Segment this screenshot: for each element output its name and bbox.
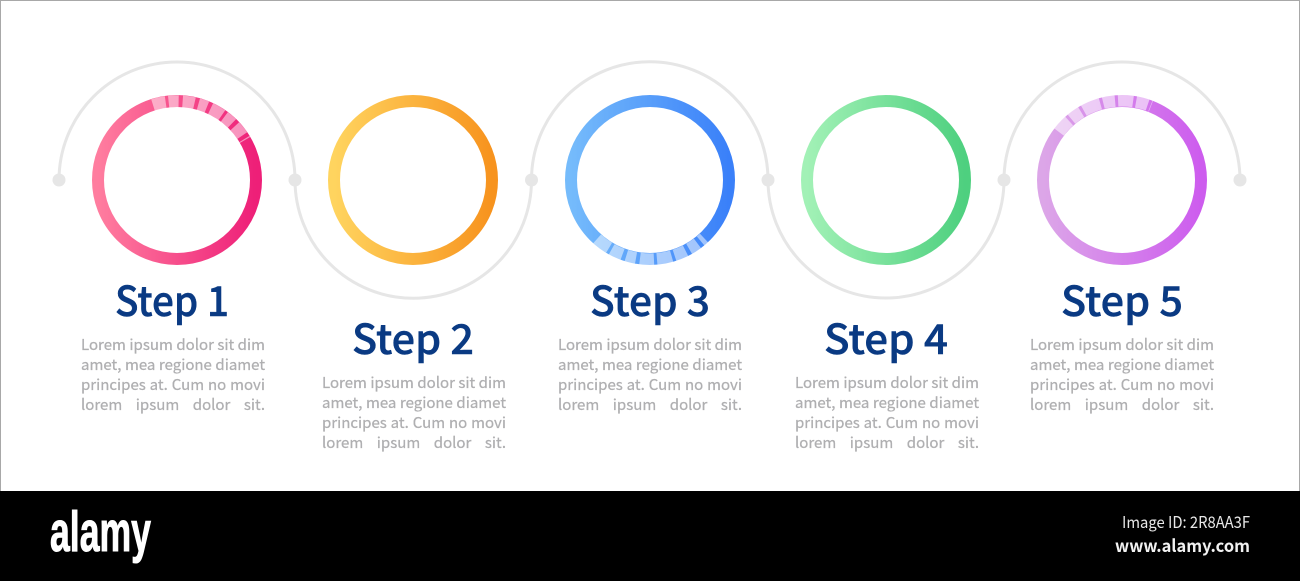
heading: Step 1: Step 1 <box>115 268 229 328</box>
ring 2 <box>334 101 492 259</box>
heading: Step 2: Step 2 <box>352 306 474 366</box>
connector arc 5 <box>1004 62 1240 180</box>
text block: step 1 <box>81 335 265 415</box>
heading: Step 3: Step 3 <box>590 268 710 328</box>
watermark fragment on ring 5 <box>1059 101 1151 132</box>
heading: Step 4: Step 4 <box>824 306 948 366</box>
text block: step 2 <box>322 373 506 453</box>
text block: step 4 <box>795 373 979 453</box>
connector arc 4 <box>768 180 1004 298</box>
text block: step 5 <box>1030 335 1214 415</box>
alamy logo: alamy <box>50 500 151 564</box>
connector arc 2 <box>295 180 532 298</box>
image id: Image ID: 2R8AA3F <box>1122 509 1250 533</box>
ring 5 <box>1043 101 1201 259</box>
connector arc 3 <box>532 62 768 180</box>
ring 4 <box>807 101 965 259</box>
footer band <box>0 491 1300 581</box>
connector arc 1 <box>59 62 295 180</box>
heading: Step 5: Step 5 <box>1061 268 1183 328</box>
website: www.alamy.com <box>1115 532 1250 557</box>
ring 3 <box>571 101 729 259</box>
connector dots <box>52 174 1246 186</box>
text block: step 3 <box>558 335 742 415</box>
watermark fragment on ring 1 <box>153 101 245 140</box>
ring 1 <box>98 101 256 259</box>
watermark fragment on ring 3 <box>597 238 704 259</box>
